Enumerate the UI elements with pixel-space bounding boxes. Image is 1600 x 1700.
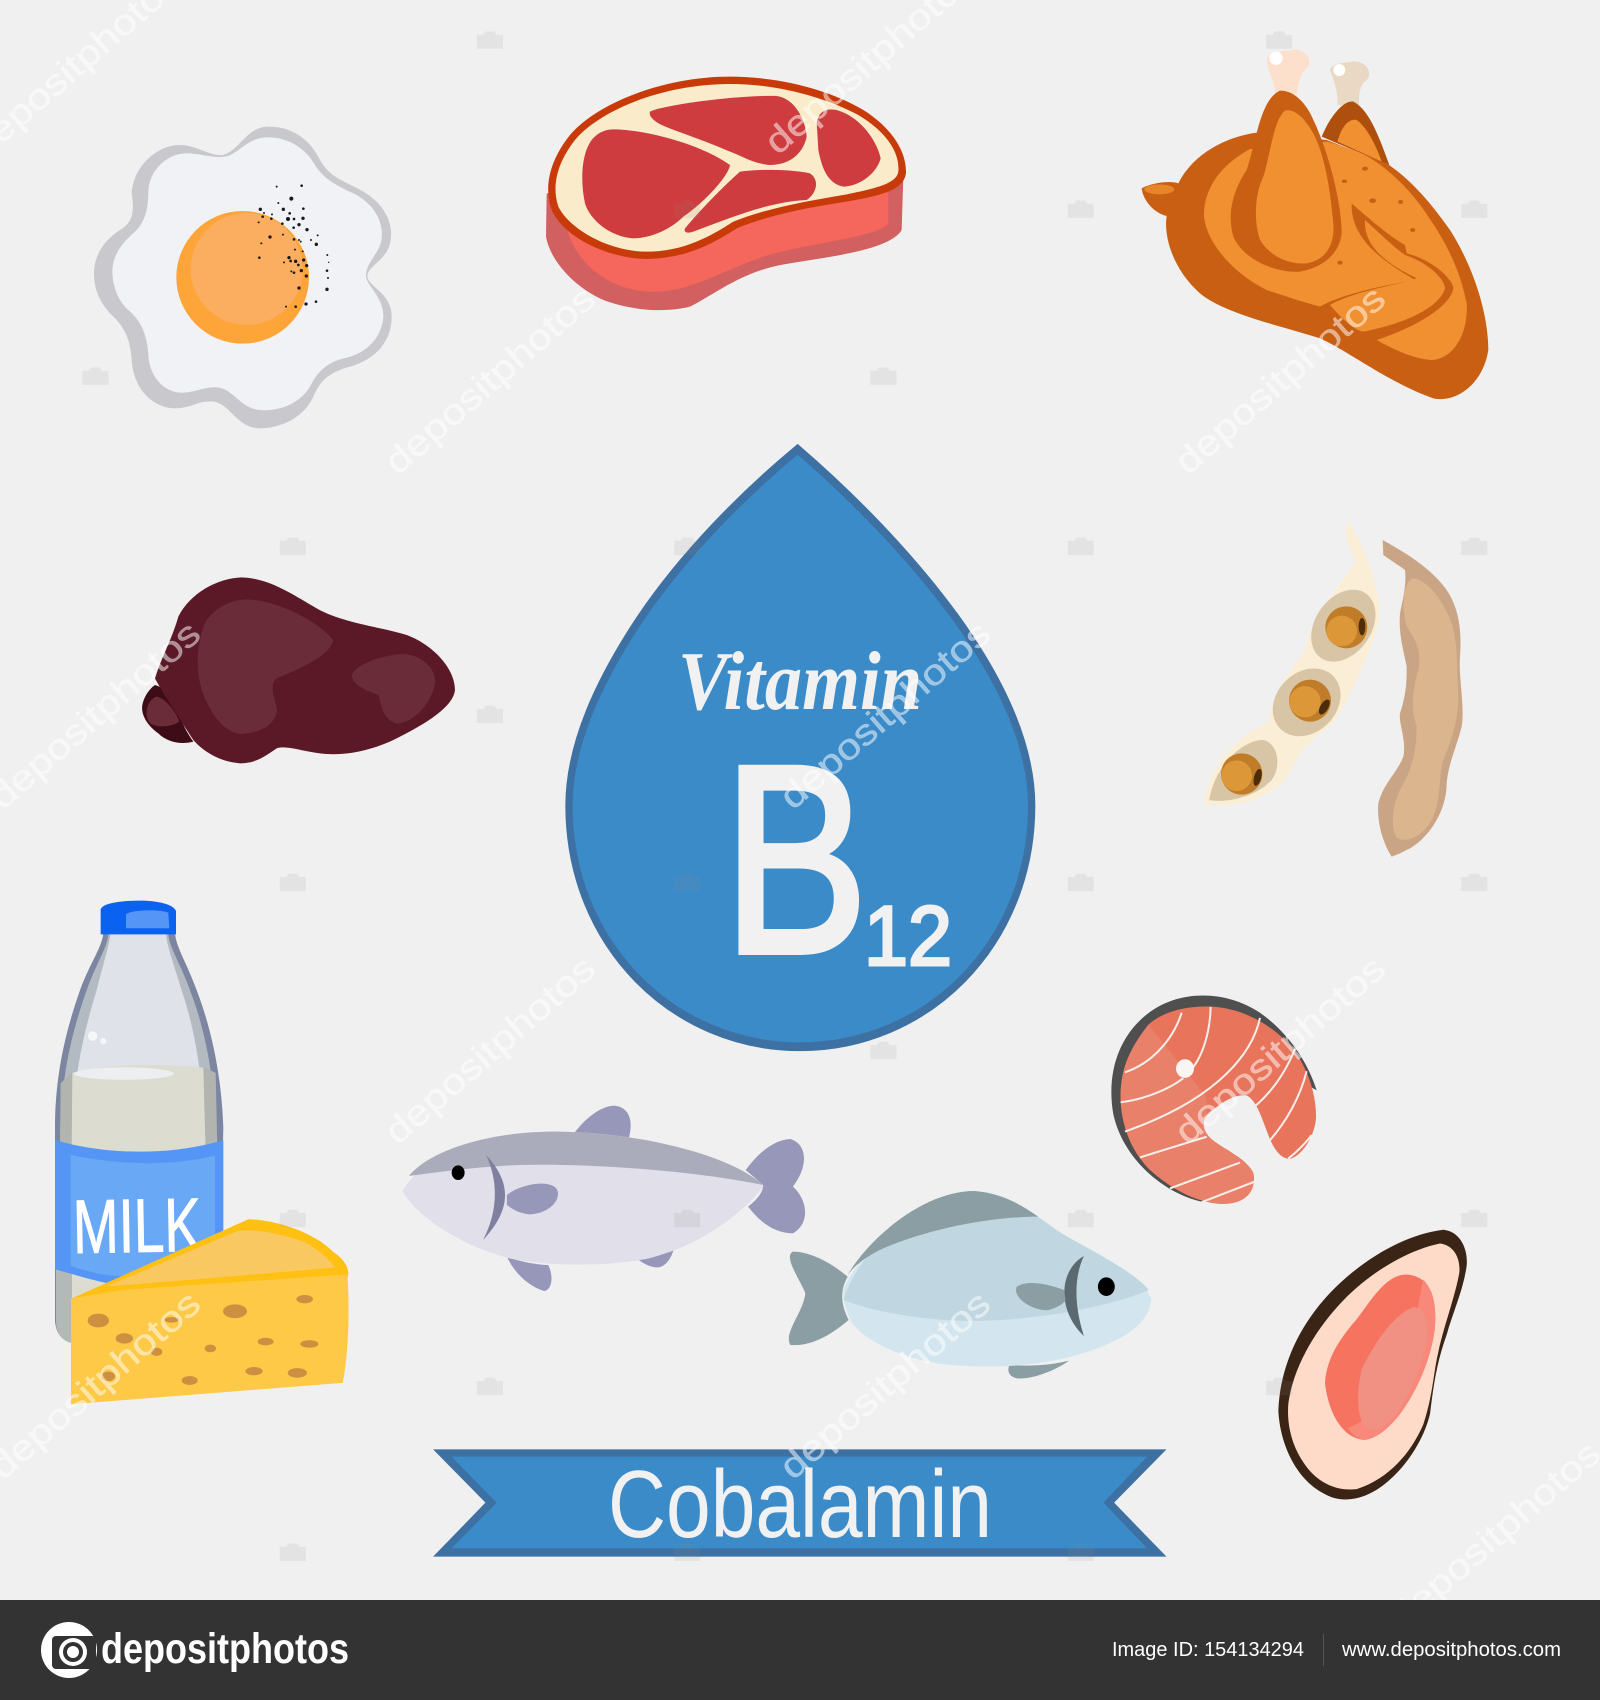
icon: salmon steak	[1111, 995, 1317, 1204]
watermarks: depositphotos	[376, 947, 603, 1152]
banner: ribbon	[433, 1449, 1166, 1557]
icon: fried egg	[94, 127, 392, 428]
icon: grey herring fish	[402, 1106, 805, 1291]
heading: letter B: B	[723, 709, 868, 1009]
icon: cheese wedge	[71, 1219, 349, 1404]
watermark: camera icons	[82, 31, 1487, 1561]
icon: vitamin water drop	[569, 449, 1032, 1047]
watermarks: depositphotos	[1166, 947, 1393, 1152]
watermarks: depositphotos	[771, 612, 998, 817]
icon: mussel	[1278, 1230, 1467, 1499]
banner text: Cobalamin: Cobalamin	[608, 1451, 992, 1558]
watermarks: depositphotos	[771, 1282, 998, 1487]
footer image id: Image ID: 154134294	[1112, 1639, 1304, 1661]
icon: liver	[142, 577, 455, 763]
watermarks: depositphotos	[1381, 1432, 1600, 1637]
watermarks: depositphotos	[376, 277, 603, 482]
watermarks: depositphotos	[1166, 277, 1393, 482]
heading: Vitamin: Vitamin	[678, 635, 922, 728]
icon: milk bottle	[55, 901, 223, 1343]
icon: soybeans	[1204, 522, 1463, 857]
icon: roast turkey	[1142, 49, 1488, 399]
icon: beef steak	[546, 77, 906, 310]
heading: subscript 12: 12	[864, 889, 952, 983]
footer logo mark	[41, 1622, 97, 1678]
label: MILK: MILK	[72, 1183, 202, 1270]
footer bar	[0, 1600, 1600, 1700]
footer logo text: depositphotos	[101, 1625, 349, 1673]
icon: blue sea bream fish	[789, 1191, 1151, 1379]
footer website: www.depositphotos.com	[1341, 1639, 1561, 1661]
